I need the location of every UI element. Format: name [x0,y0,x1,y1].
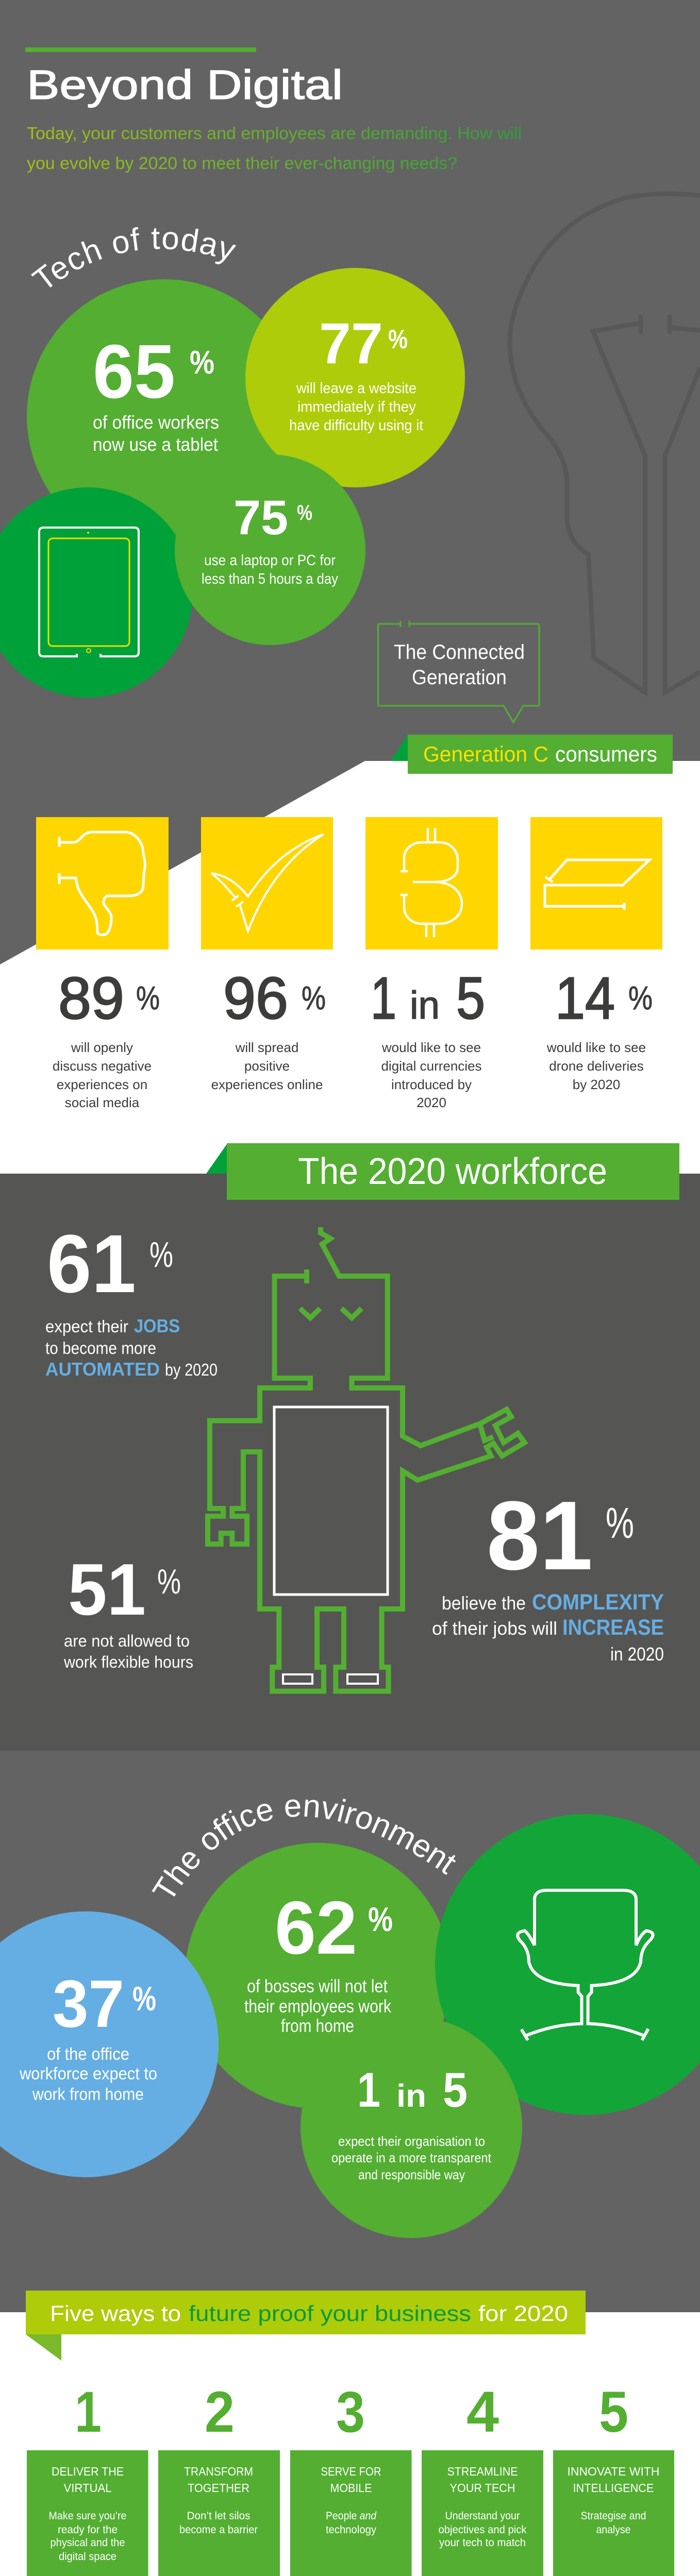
card: positive experiences: % [302,979,326,1016]
robot eyes [300,1309,362,1318]
stat: 65 percent: 65 [93,329,175,414]
icon: thumbs down [59,832,145,935]
panel: workforce [45,1217,664,1691]
card 3: serve for mobile: 3 [336,2380,365,2444]
stat: 61 percent: JOBS [134,1315,180,1336]
stat: 51 percent: % [157,1562,181,1601]
stat: 37 percent: 37 [53,1966,124,2041]
card: digital currencies: introduced by [391,1077,472,1092]
card 1: deliver the virtual: ready for the [58,2524,118,2536]
panel: office environment [0,1799,700,2238]
card: positive experiences: experiences online [211,1077,323,1092]
stat: 65 percent: now use a tablet [93,434,218,455]
banner: five ways: for 2020 [478,2301,568,2326]
circle: chair background [435,1814,700,2115]
heading: tech of today: Tech of today [31,227,236,287]
card 2: transform together: 2 [205,2380,235,2444]
circle: 77% [245,268,465,487]
card: digital currencies: digital currencies [381,1058,482,1074]
stat: 51 percent: work flexible hours [63,1653,193,1671]
card 2: transform together: Don’t let silos [187,2510,251,2522]
stat: 81 percent: COMPLEXITY [532,1590,664,1615]
icon: digital currency [401,828,462,937]
card: negative experiences: will openly [71,1040,133,1055]
card 1: deliver the virtual [27,2380,148,2576]
card: negative experiences: social media [65,1095,140,1110]
callout: the connected generation [378,621,539,722]
stat: 62 percent: % [368,1900,393,1938]
stat: 81 percent: of their jobs will [432,1618,557,1639]
card 5: innovate with intelligence: INTELLIGENCE [573,2481,654,2495]
stat: 65 percent: of office workers [93,412,219,433]
banner: five ways: Five ways to [50,2301,181,2326]
stat: 51 percent [63,1549,193,1671]
card: positive experiences: will spread [235,1040,298,1055]
stat: 65 percent [93,329,219,455]
card 2: transform together: become a barrier [179,2524,258,2536]
circle: 37% [0,1911,219,2177]
icon: background light bulb [510,194,700,692]
stat: 61 percent: expect their [45,1317,128,1336]
panel: header [25,47,522,173]
card 4: streamline your tech: STREAMLINE [447,2465,518,2478]
card: digital currencies [365,817,498,1110]
stat: 37 percent: work from home [32,2084,144,2104]
card: digital currencies: 5 [456,965,485,1031]
card 4: streamline your tech: your tech to match [439,2537,526,2549]
card 3: serve for mobile: People and [326,2510,377,2522]
stat: 75 percent: use a laptop or PC for [204,552,336,569]
stat: 75 percent: less than 5 hours a day [202,571,338,587]
card 2: transform together: TOGETHER [188,2481,249,2495]
circle: 62% [185,1843,451,2109]
card 5: innovate with intelligence: 5 [599,2380,628,2444]
stat: 81 percent: % [606,1499,634,1547]
stat: 1 in 5: and responsible way [358,2167,465,2182]
banner: the 2020 workforce [206,1143,679,1200]
panel: five ways white background [0,2312,700,2576]
stat: 61 percent: % [149,1234,173,1275]
card 4: streamline your tech: Understand your [445,2510,520,2522]
banner: generation c consumers [391,735,673,774]
card: digital currencies: 1 [371,965,396,1031]
stat: 81 percent: believe the [442,1592,526,1614]
panel: tech of today [0,227,465,698]
stat: 37 percent: of the office [47,2044,129,2063]
icon: drone delivery box [545,860,649,910]
stat: 81 percent: in 2020 [610,1643,664,1665]
card: drone deliveries: drone deliveries [549,1058,644,1074]
banner: five ways: future proof your business [189,2301,471,2326]
stat: 75 percent: 75 [234,490,288,545]
stat: 61 percent: by 2020 [165,1360,218,1379]
card: negative experiences: experiences on [57,1077,147,1092]
card 5: innovate with intelligence [553,2380,674,2576]
card: drone deliveries: by 2020 [573,1077,620,1092]
stat: 77 percent [289,311,423,434]
card 1: deliver the virtual: VIRTUAL [64,2481,112,2495]
stat: 81 percent [432,1481,664,1665]
icon: robot [208,1227,525,1691]
stat: 77 percent: immediately if they [297,399,416,415]
card 4: streamline your tech: YOUR TECH [449,2481,515,2495]
stat: 65 percent: % [190,344,214,381]
stat: 62 percent [244,1886,393,2036]
icon: office chair [518,1890,653,2040]
card 1: deliver the virtual: DELIVER THE [52,2465,124,2478]
card: negative experiences: discuss negative [53,1058,152,1074]
card: drone deliveries: % [628,979,653,1016]
card: negative experiences: 89 [58,965,124,1031]
subtitle: Today, your customers and employees are demanding. How will [27,124,522,143]
stat: 61 percent: to become more [45,1338,156,1358]
card 3: serve for mobile: SERVE FOR [321,2465,381,2478]
stat: 75 percent [202,490,338,587]
stat: 81 percent: 81 [487,1481,593,1590]
panel: generation c white background [0,761,700,1174]
stat: 62 percent: of bosses will not let [247,1976,388,1996]
callout: the connected generation: Generation [412,666,507,689]
card: digital currencies: would like to see [381,1040,481,1055]
stat: 51 percent: are not allowed to [64,1632,190,1650]
card 1: deliver the virtual: physical and the [51,2537,125,2549]
circle: 75% [175,454,365,645]
card: digital currencies: in [410,984,440,1027]
card 5: innovate with intelligence: INNOVATE WITH [567,2465,660,2478]
banner: five ways [26,2291,586,2361]
stat: 77 percent: 77 [319,311,383,376]
stat: 77 percent: will leave a website [296,380,416,397]
card 4: streamline your tech: 4 [466,2380,499,2444]
stat: 51 percent: 51 [68,1549,146,1631]
stat: 1 in 5 [331,2063,492,2182]
card: drone deliveries: would like to see [546,1040,646,1055]
card: positive experiences: positive [244,1058,290,1074]
card 3: serve for mobile: MOBILE [330,2481,372,2495]
title: Beyond Digital [27,62,343,108]
card 2: transform together: TRANSFORM [184,2465,253,2478]
panel: generation c stats [36,817,662,1110]
stat: 75 percent: % [297,500,312,524]
header accent bar [25,47,256,52]
card 3: serve for mobile: technology [326,2524,376,2536]
stat: 61 percent: 61 [47,1217,136,1310]
stat: 62 percent: their employees work [244,1996,391,2016]
card 5: innovate with intelligence: Strategise and [580,2510,646,2522]
banner: generation c consumers: consumers [555,742,657,766]
card: negative experiences [36,817,169,1110]
card 1: deliver the virtual: digital space [59,2551,116,2563]
robot chest screen [274,1407,388,1595]
card: positive experiences [201,817,333,1092]
card 4: streamline your tech: objectives and pick [438,2524,527,2536]
card 5: innovate with intelligence: analyse [596,2524,631,2536]
card: drone deliveries [530,817,662,1092]
stat: 1 in 5: expect their organisation to [338,2133,485,2149]
stat: 37 percent [19,1966,157,2104]
circle: 65% tablet users [27,279,301,553]
callout: the connected generation: The Connected [394,641,525,664]
stat: 1 in 5: operate in a more transparent [331,2150,492,2165]
card 2: transform together [158,2380,280,2576]
stat: 77 percent: have difficulty using it [289,417,423,434]
stat: 37 percent: workforce expect to [19,2064,157,2083]
card: negative experiences: % [136,979,160,1016]
card 3: serve for mobile [290,2380,411,2576]
stat: 1 in 5: 5 [443,2063,468,2117]
stat: 1 in 5: 1 [357,2063,380,2117]
card 1: deliver the virtual: 1 [75,2380,102,2444]
stat: 61 percent [45,1217,218,1380]
panel: five ways cards [27,2380,674,2576]
icon: tablet [39,528,139,656]
stat: 61 percent: AUTOMATED [45,1359,160,1380]
banner: generation c consumers: Generation C [423,742,548,766]
banner: the 2020 workforce: The 2020 workforce [298,1151,607,1192]
icon: check mark [211,834,324,931]
card 1: deliver the virtual: Make sure you’re [48,2510,127,2522]
robot feet [283,1674,378,1684]
card 4: streamline your tech [422,2380,543,2576]
stat: 81 percent: INCREASE [562,1615,664,1640]
stat: 37 percent: % [132,1979,156,2018]
circle: tablet icon background [0,487,193,698]
stat: 1 in 5: in [396,2078,426,2114]
stat: 62 percent: from home [281,2016,354,2036]
card: drone deliveries: 14 [555,965,615,1031]
stat: 77 percent: % [388,325,408,354]
stat: 62 percent: 62 [275,1886,357,1970]
card: digital currencies: 2020 [416,1095,446,1110]
card: positive experiences: 96 [223,965,288,1031]
subtitle: you evolve by 2020 to meet their ever-changing needs? [27,154,457,173]
heading: the office environment: The office environment [152,1799,456,1897]
circle: 1 in 5 [301,2016,522,2238]
subtitle [27,124,522,173]
